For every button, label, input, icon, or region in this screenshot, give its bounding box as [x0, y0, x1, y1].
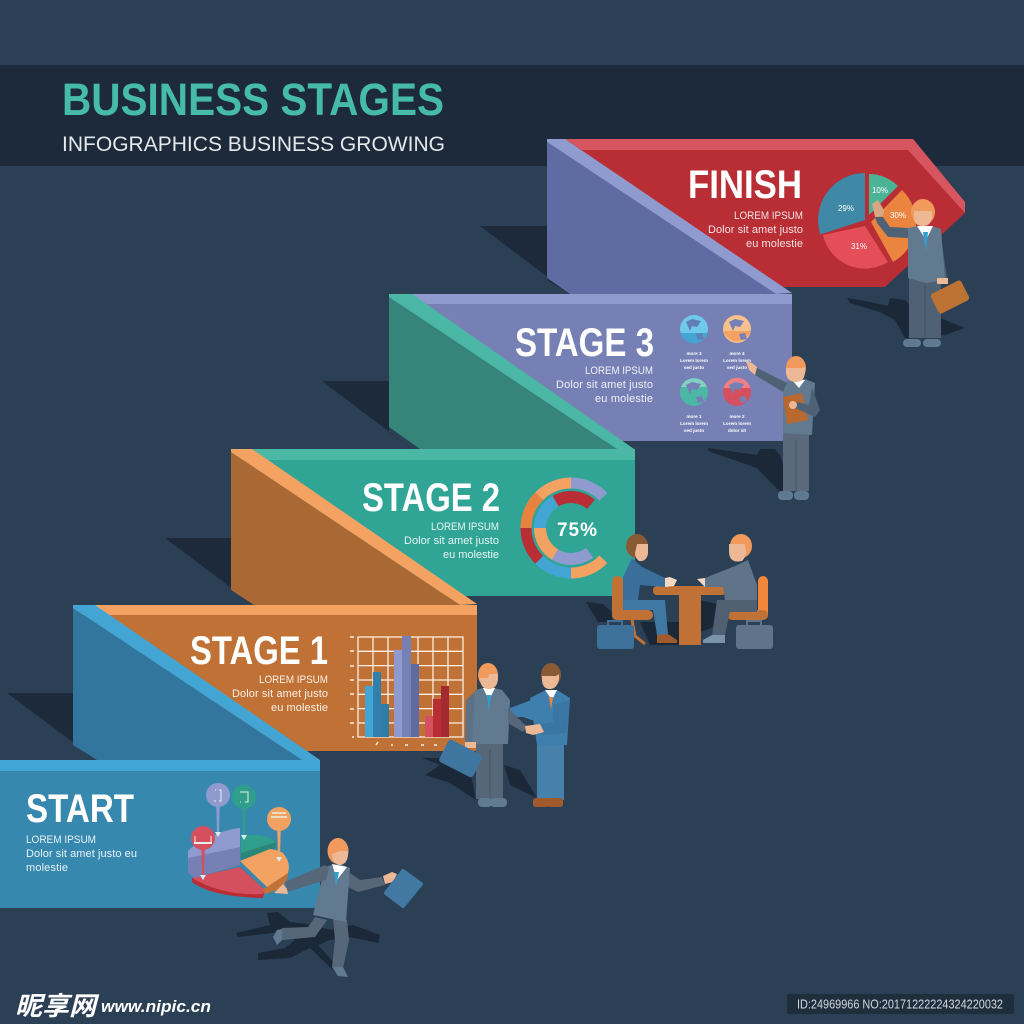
stage 3 text: eu molestie [595, 393, 653, 405]
start text: Dolor sit amet justo eu [26, 848, 137, 860]
panel: stage 3 [389, 294, 792, 449]
start heading: START [26, 787, 134, 831]
3d pie chart with pins [188, 783, 291, 898]
stage 3 text: LOREM IPSUM [585, 365, 653, 377]
stage 3 text: Dolor sit amet justo [556, 379, 653, 391]
bar chart [350, 636, 463, 745]
icon: briefcase [438, 739, 483, 778]
table [653, 586, 726, 645]
icon: briefcase [386, 871, 421, 906]
stage 2 text: eu molestie [443, 549, 499, 561]
donut chart [507, 464, 635, 592]
step shadows [7, 226, 570, 760]
stage 2 text: LOREM IPSUM [431, 521, 499, 533]
icon: briefcase [930, 279, 970, 315]
watermark logo: www.nipic.cn [101, 997, 211, 1016]
image id tag [787, 994, 1014, 1014]
right man [712, 600, 757, 635]
globe icons: more 1 [686, 414, 702, 419]
title: BUSINESS STAGES [62, 74, 444, 125]
stage 1 text: LOREM IPSUM [259, 674, 328, 686]
globe icons: sed justo [684, 365, 704, 370]
start text: molestie [26, 862, 68, 874]
left man [476, 744, 503, 799]
globe icons: Lorem lorem [680, 421, 708, 426]
finish pie chart: 29% [838, 204, 854, 213]
stage 2 text [404, 521, 499, 561]
briefcases [597, 621, 773, 649]
panel: stage 1 [73, 605, 477, 760]
globe icons: sed justo [684, 428, 704, 433]
globe icons: Lorem lorem [723, 358, 751, 363]
stage 1 text [232, 674, 328, 714]
finish text: eu molestie [746, 238, 803, 250]
stage 3 text [556, 365, 653, 405]
watermark logo [15, 991, 211, 1021]
finish text [708, 210, 803, 250]
panel: stage 2 [231, 449, 635, 605]
figure: presenter at stage 3 [746, 356, 820, 500]
globe icons: more 3 [686, 351, 702, 356]
finish heading: FINISH [688, 163, 802, 207]
globe icons [680, 315, 751, 433]
start text [26, 834, 137, 874]
finish pie chart: 10% [872, 186, 888, 195]
watermark logo: 昵享网 [15, 991, 100, 1021]
globe icons: dolor sit [728, 428, 747, 433]
finish pie chart: 30% [890, 211, 906, 220]
finish text: Dolor sit amet justo [708, 224, 803, 236]
stage 2 heading: STAGE 2 [362, 476, 500, 520]
stage 3 heading: STAGE 3 [515, 321, 654, 365]
stage 1 heading: STAGE 1 [190, 629, 328, 673]
chairs [612, 576, 768, 644]
globe icons: more 2 [729, 414, 745, 419]
figure: handshake [438, 663, 570, 807]
globe icons: Lorem lorem [680, 358, 708, 363]
donut chart: 75% [557, 520, 597, 541]
finish pie chart [818, 173, 916, 269]
right man [537, 745, 564, 800]
finish pie chart: 31% [851, 242, 867, 251]
left man [623, 600, 668, 635]
panel: finish [547, 139, 965, 294]
subtitle: INFOGRAPHICS BUSINESS GROWING [62, 132, 445, 156]
figure: meeting at table [597, 534, 773, 649]
figure: presenter at finish [872, 199, 970, 347]
figure: running man [273, 838, 421, 977]
figure shadows [236, 298, 965, 975]
start text: LOREM IPSUM [26, 834, 96, 846]
stage 1 text: eu molestie [271, 702, 328, 714]
globe icons: Lorem lorem [723, 421, 751, 426]
globe icons: more 4 [729, 351, 745, 356]
finish text: LOREM IPSUM [734, 210, 803, 222]
panel: start [0, 760, 320, 908]
globe icons: sed justo [727, 365, 747, 370]
stage 2 text: Dolor sit amet justo [404, 535, 499, 547]
stage 1 text: Dolor sit amet justo [232, 688, 328, 700]
header band [0, 65, 1024, 166]
